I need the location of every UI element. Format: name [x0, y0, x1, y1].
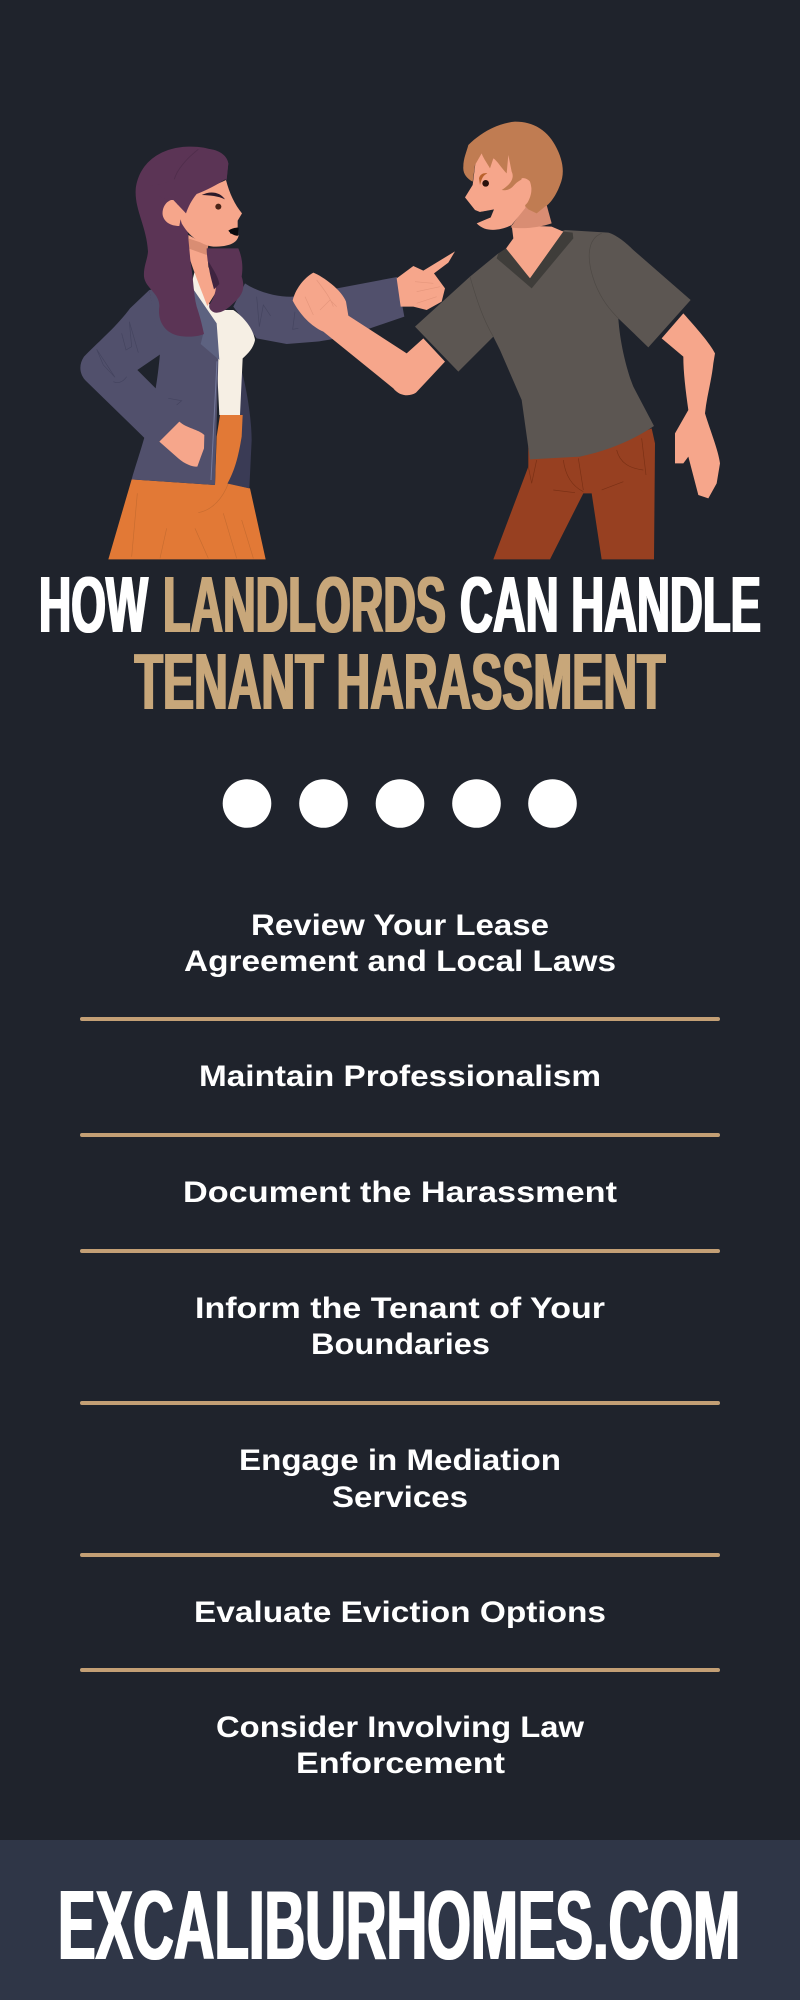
hair strands — [174, 149, 198, 179]
jacket creases — [97, 297, 298, 405]
list item: eviction: Evaluate Eviction Options — [194, 1596, 606, 1629]
hair right lobe — [207, 248, 243, 313]
man ear — [518, 178, 531, 205]
illustration: man — [293, 122, 720, 559]
list item: lease and laws — [184, 909, 616, 978]
neck shadow — [511, 205, 552, 228]
man forearm and fist — [293, 273, 445, 395]
front hair — [150, 149, 228, 213]
illustration: woman — [80, 147, 404, 559]
man mouth — [477, 209, 494, 223]
man sleeve and shirt — [415, 230, 691, 459]
fist creases — [305, 280, 337, 315]
man hanging arm — [662, 313, 720, 498]
list item: mediation — [239, 1444, 561, 1514]
neck shadow — [188, 238, 208, 255]
list item: boundaries: Inform the Tenant of Your — [195, 1292, 605, 1325]
list item: boundaries: Boundaries — [311, 1328, 490, 1361]
man neck — [505, 225, 563, 278]
list item: law enforcement: Enforcement — [296, 1747, 505, 1780]
list item: lease and laws: Agreement and Local Laws — [184, 945, 616, 978]
skirt folds — [132, 483, 253, 558]
list item: law enforcement: Consider Involving Law — [216, 1711, 585, 1744]
title line one: how: HOW — [39, 560, 148, 649]
woman bent arm sleeve — [80, 290, 182, 445]
eyebrow — [202, 192, 225, 199]
list item: document: Document the Harassment — [183, 1176, 617, 1209]
white shirt — [192, 270, 255, 415]
footer band — [0, 1840, 800, 2000]
man eye — [482, 180, 489, 187]
jacket body — [132, 283, 218, 485]
pants — [493, 428, 655, 559]
woman fist — [159, 422, 204, 467]
lapel — [189, 283, 219, 360]
eye — [215, 204, 221, 210]
list item: boundaries — [195, 1292, 605, 1361]
list item: lease and laws: Review Your Lease — [251, 909, 549, 942]
title — [39, 560, 761, 726]
man face — [465, 153, 533, 230]
skirt waist — [215, 415, 243, 485]
man hair — [463, 122, 563, 213]
pants creases — [528, 438, 646, 493]
hair shadow — [209, 262, 219, 289]
woman pointing hand — [397, 251, 455, 310]
ear — [163, 199, 182, 226]
jacket inner panel — [227, 365, 252, 488]
man eyebrow — [479, 173, 487, 185]
list item: mediation: Engage in Mediation — [239, 1444, 561, 1477]
zipper — [211, 361, 217, 480]
list item: professionalism: Maintain Professionalism — [199, 1060, 601, 1093]
shirt seams — [470, 233, 618, 337]
face — [177, 180, 242, 247]
five white dots — [223, 779, 577, 828]
neck — [188, 235, 217, 306]
list item: mediation: Services — [332, 1481, 468, 1514]
v collar — [497, 232, 573, 288]
hair — [136, 147, 228, 337]
skirt — [108, 479, 266, 559]
woman raised arm sleeve — [233, 277, 404, 344]
list item: law enforcement — [216, 1711, 585, 1780]
mouth — [228, 228, 239, 236]
title line one: landlords: LANDLORDS — [163, 560, 446, 649]
